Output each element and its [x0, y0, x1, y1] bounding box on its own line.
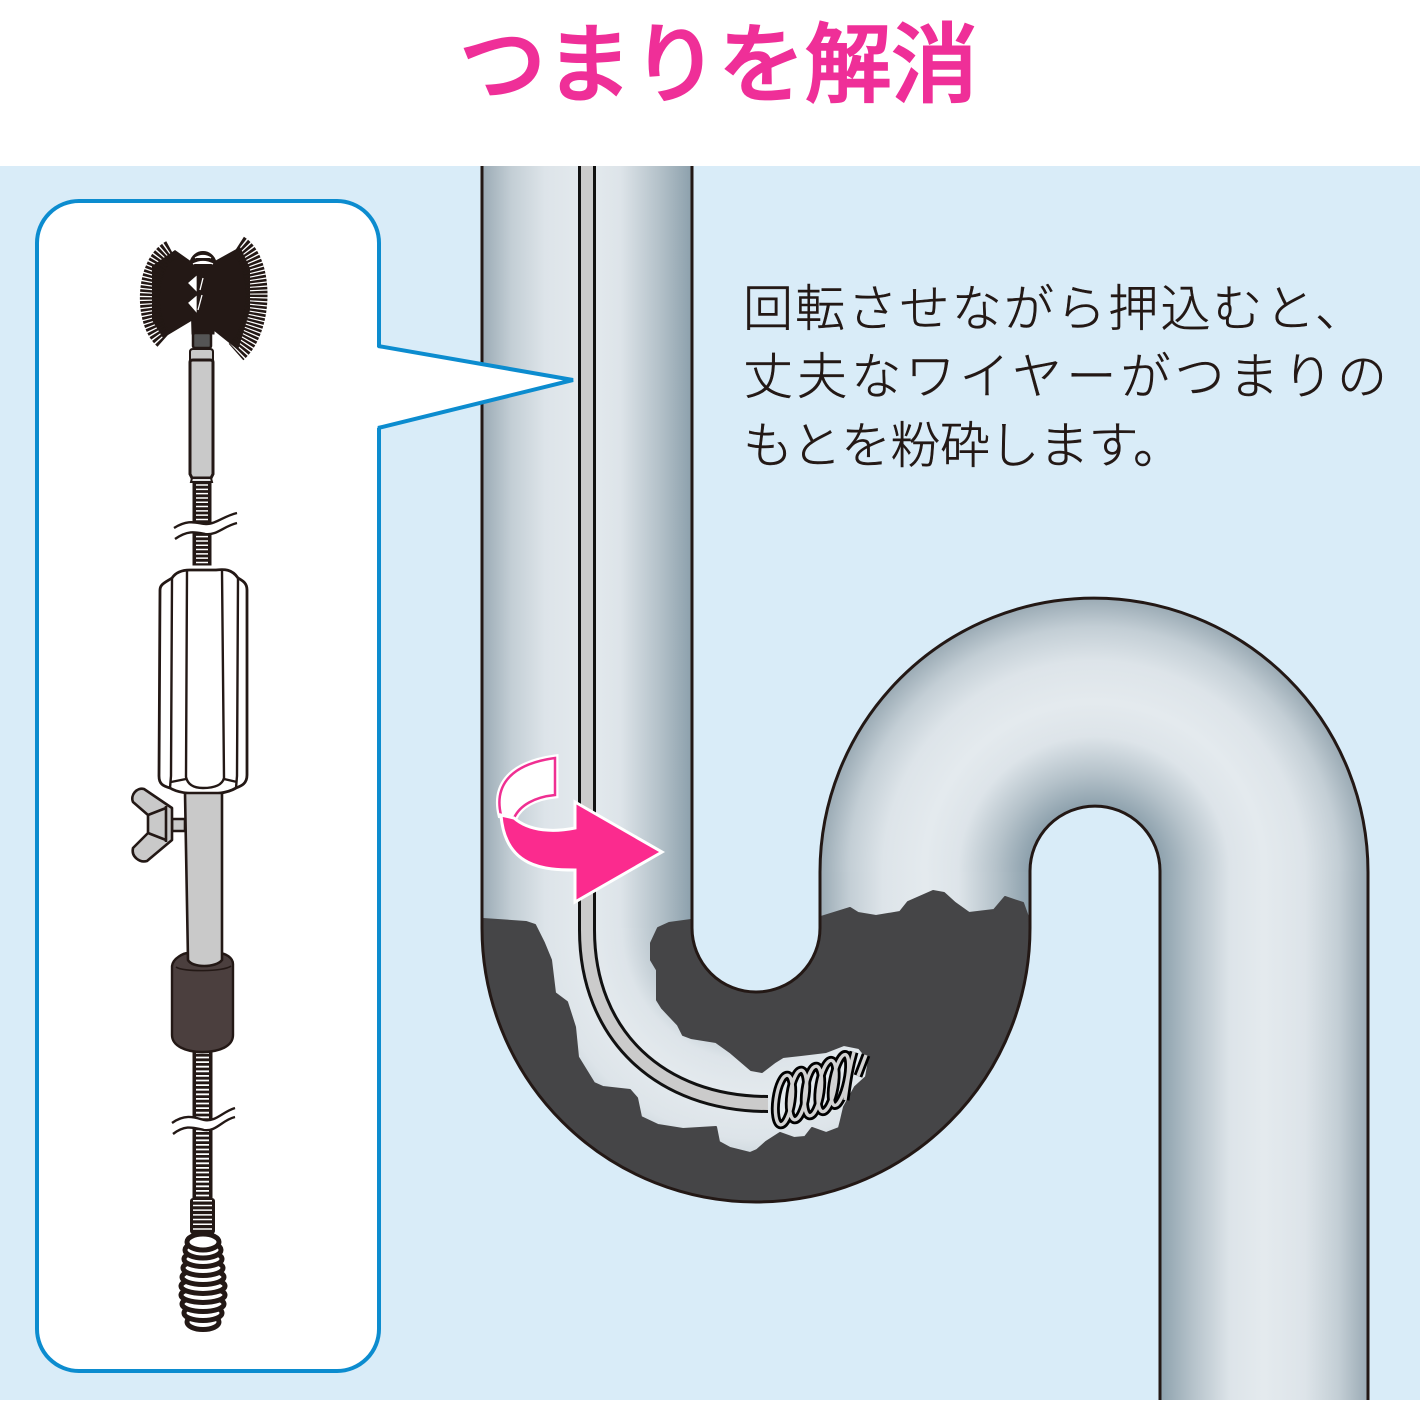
pipe bottom bend — [482, 928, 1030, 1202]
lower break mark — [172, 1108, 235, 1134]
spring head core — [773, 1052, 866, 1126]
text line 1: 回転させながら押込むと、 — [743, 281, 1365, 337]
wing nut — [132, 789, 185, 861]
clog debris — [482, 891, 1030, 1202]
pipe middle riser — [820, 871, 1030, 929]
brush — [150, 246, 257, 352]
upper spring section — [193, 480, 211, 565]
pipe right straight section — [1160, 871, 1368, 1400]
pipe left straight section — [482, 166, 692, 929]
explanatory text — [743, 281, 1387, 474]
callout panel with tail — [37, 201, 573, 1371]
pipe top bend — [820, 598, 1368, 872]
wire cable with spring head — [587, 166, 866, 1126]
brush highlights — [189, 256, 213, 311]
left bristle fan — [152, 250, 193, 338]
S-trap drain pipe — [482, 166, 1368, 1400]
callout box — [37, 201, 379, 1371]
pink rotation arrow — [499, 758, 662, 902]
callout tail fill — [376, 347, 573, 428]
white grip — [159, 570, 247, 794]
spring head outline — [773, 1052, 866, 1126]
left bristle tips — [150, 250, 171, 340]
arrow ribbon back outline — [499, 758, 555, 818]
brush nut — [193, 333, 211, 348]
wire core — [587, 166, 768, 1104]
barrel coil head — [181, 1234, 225, 1330]
small coil — [190, 1198, 215, 1234]
text line 2: 丈夫なワイヤーがつまりの — [743, 349, 1387, 405]
right bristle tips — [236, 246, 257, 352]
upper break mark — [174, 513, 237, 539]
callout tail outline — [378, 346, 573, 428]
centre hub — [190, 252, 216, 334]
wire outline — [587, 166, 768, 1104]
title: つまりを解消 — [459, 17, 978, 114]
upper rod — [190, 360, 213, 478]
drain cleaner tool — [132, 246, 257, 1330]
pipe outer outline — [482, 166, 1160, 1400]
pipe inner outline — [692, 166, 1368, 1400]
upper rod collar — [190, 349, 213, 360]
upper rod end — [191, 478, 212, 482]
lower spring section — [193, 1050, 212, 1202]
dark collar and lower rod — [172, 793, 233, 1052]
arrow ribbon back — [499, 758, 555, 818]
right bristle fan — [213, 247, 250, 350]
text line 3: もとを粉砕します。 — [743, 418, 1183, 474]
arrow body and head — [501, 802, 662, 902]
